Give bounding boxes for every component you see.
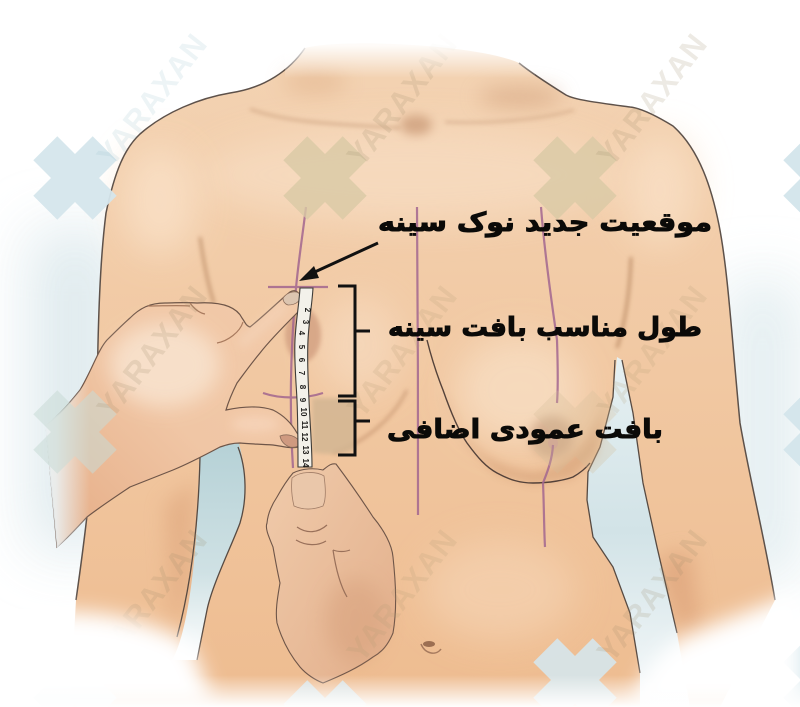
left hand holding tape top [46, 291, 301, 547]
bottom fade [0, 675, 800, 707]
right clavicle [445, 110, 574, 122]
thumb nail [292, 472, 325, 509]
left meridian [291, 207, 306, 468]
neck shadow right [478, 87, 562, 107]
watermark text: YARAXAN [340, 279, 464, 424]
tape numbers: 3 [301, 320, 310, 325]
watermark text: YARAXAN [340, 523, 464, 668]
bracket: suitable tissue length [338, 286, 370, 396]
tape numbers: 11 [300, 421, 309, 430]
left breast lower contour [333, 390, 407, 453]
label: suitable tissue length: طول مناسب بافت سینه [388, 313, 702, 343]
navel [421, 641, 441, 653]
right gap [587, 357, 690, 707]
upper tick [268, 286, 328, 288]
right arm band shadow [655, 550, 700, 630]
right armpit crease [617, 257, 631, 348]
lower left fade [0, 607, 212, 707]
right meridian [541, 207, 558, 547]
tape numbers: 10 [299, 408, 308, 417]
tape numbers: 4 [297, 331, 306, 336]
bracket: excess vertical tissue [338, 401, 370, 455]
hand shape [266, 464, 396, 683]
tape numbers: 13 [301, 446, 310, 455]
tape numbers: 14 [301, 459, 310, 468]
thumb highlight [231, 416, 279, 432]
tape numbers: 6 [297, 358, 306, 363]
pale blue glow left [30, 230, 120, 550]
watermark row 1 [33, 136, 800, 220]
label: new nipple position: موقعیت جدید نوک سینه [378, 208, 712, 238]
nipple right [548, 437, 558, 449]
index nail [283, 292, 300, 305]
tape numbers: 7 [297, 371, 306, 376]
tape numbers [297, 308, 312, 468]
excess tissue band [312, 398, 355, 454]
back-of-hand highlight [110, 323, 220, 407]
forearm and palm [46, 291, 301, 547]
left arm band shadow [165, 480, 196, 630]
right breast lower shading [443, 390, 607, 484]
forearm fade [45, 378, 90, 548]
watermark text: YARAXAN [90, 523, 214, 668]
centre line [417, 207, 418, 515]
tape body [295, 288, 313, 467]
neck top fade [285, 20, 535, 78]
gap outlines [177, 360, 677, 673]
watermark text: YARAXAN [590, 523, 714, 668]
tape numbers: 12 [300, 433, 309, 442]
lower hand holding tape [266, 464, 396, 683]
finger creases [148, 303, 243, 343]
arrow to new nipple position [299, 243, 378, 281]
right arm outer outline [519, 63, 775, 600]
right shoulder highlight [624, 135, 696, 245]
watermark text: YARAXAN [590, 27, 714, 172]
surgical marking lines [263, 207, 558, 547]
left areola [285, 308, 321, 362]
watermark text [90, 27, 714, 668]
areola right [530, 416, 574, 458]
left breast highlight [318, 295, 402, 395]
lower tick [263, 393, 323, 398]
abdomen highlight [425, 540, 575, 640]
lower right fade [632, 590, 800, 707]
tape numbers: 9 [298, 398, 307, 403]
left gap [172, 440, 245, 660]
left clavicle [250, 109, 400, 128]
watermark row 3 [33, 638, 800, 707]
left shoulder highlight [122, 145, 198, 255]
watermark text: YARAXAN [590, 279, 714, 424]
watermark row 2 [33, 390, 800, 474]
measuring tape [295, 288, 313, 468]
watermark text: YARAXAN [90, 279, 214, 424]
watermark text: YARAXAN [90, 27, 214, 172]
hand creases [296, 525, 350, 597]
right breast highlight [455, 335, 585, 445]
sternal notch [400, 115, 432, 135]
label: excess vertical tissue: بافت عمودی اضافی [387, 415, 663, 445]
left armpit crease [200, 237, 214, 303]
tape numbers: 2 [303, 308, 312, 313]
watermark text: YARAXAN [340, 27, 464, 172]
left arm outer outline [76, 48, 305, 600]
chest highlight [200, 127, 620, 223]
right breast contour [427, 340, 590, 483]
thumb nail [280, 435, 300, 447]
tape numbers: 8 [298, 385, 307, 390]
palm shadow [325, 578, 385, 662]
pale blue glow right [725, 280, 800, 580]
neck shadow left [283, 69, 347, 95]
tape numbers: 5 [297, 345, 306, 350]
index highlight [240, 305, 285, 345]
